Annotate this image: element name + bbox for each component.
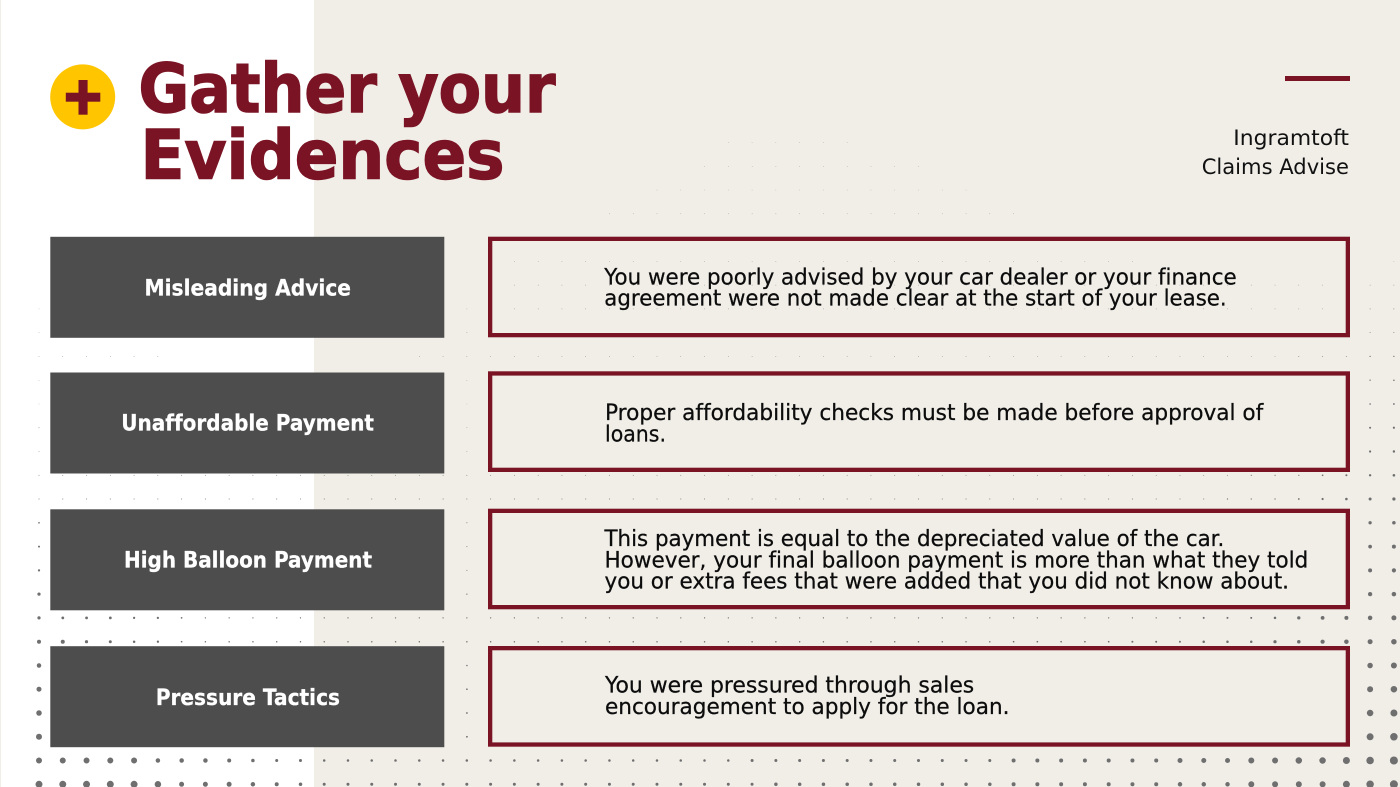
- label box: Pressure Tactics: [50, 646, 444, 747]
- description box: Misleading Advice: agreement were not made clear at the start of your lease.: [604, 286, 1227, 312]
- row 3: High Balloon Payment: [50, 509, 1348, 610]
- description box: Misleading Advice: You were poorly advised by your car dealer or your finance: [603, 265, 1237, 290]
- brand text: Ingramtoft: [1233, 126, 1349, 150]
- title: Evidences: [140, 116, 504, 196]
- brand text: Claims Advise: [1202, 155, 1349, 179]
- label box: High Balloon Payment: High Balloon Payment: [124, 549, 372, 574]
- row 4: Pressure Tactics: [50, 646, 1348, 747]
- description box: Pressure Tactics: [490, 648, 1348, 745]
- title: [138, 50, 556, 196]
- icon: yellow plus badge: [50, 64, 115, 129]
- description box: Pressure Tactics: encouragement to apply for the loan.: [605, 695, 1010, 720]
- description box: High Balloon Payment: [490, 511, 1348, 607]
- description box: Unaffordable Payment: loans.: [605, 422, 666, 447]
- label box: Misleading Advice: Misleading Advice: [144, 277, 351, 302]
- row 1: Misleading Advice: [50, 237, 1348, 338]
- label box: Unaffordable Payment: Unaffordable Payment: [121, 412, 374, 437]
- accent line: [1285, 76, 1350, 81]
- label box: High Balloon Payment: [50, 509, 444, 610]
- description box: High Balloon Payment: However, your final balloon payment is more than what they told: [604, 548, 1308, 573]
- brand text: [1202, 126, 1349, 179]
- description box: High Balloon Payment: you or extra fees that were added that you did not know about.: [604, 569, 1289, 594]
- description box: Unaffordable Payment: Proper affordability checks must be made before approval of: [605, 401, 1265, 426]
- title: Gather your: [138, 50, 556, 129]
- description box: Misleading Advice: [490, 239, 1348, 335]
- description box: Pressure Tactics: You were pressured through sales: [604, 674, 974, 699]
- description box: High Balloon Payment: This payment is equal to the depreciated value of the car.: [604, 527, 1224, 552]
- row 2: Unaffordable Payment: [50, 372, 1348, 474]
- description box: Unaffordable Payment: [490, 373, 1348, 470]
- label box: Pressure Tactics: Pressure Tactics: [156, 686, 340, 711]
- label box: Unaffordable Payment: [50, 372, 444, 474]
- label box: Misleading Advice: [50, 237, 444, 338]
